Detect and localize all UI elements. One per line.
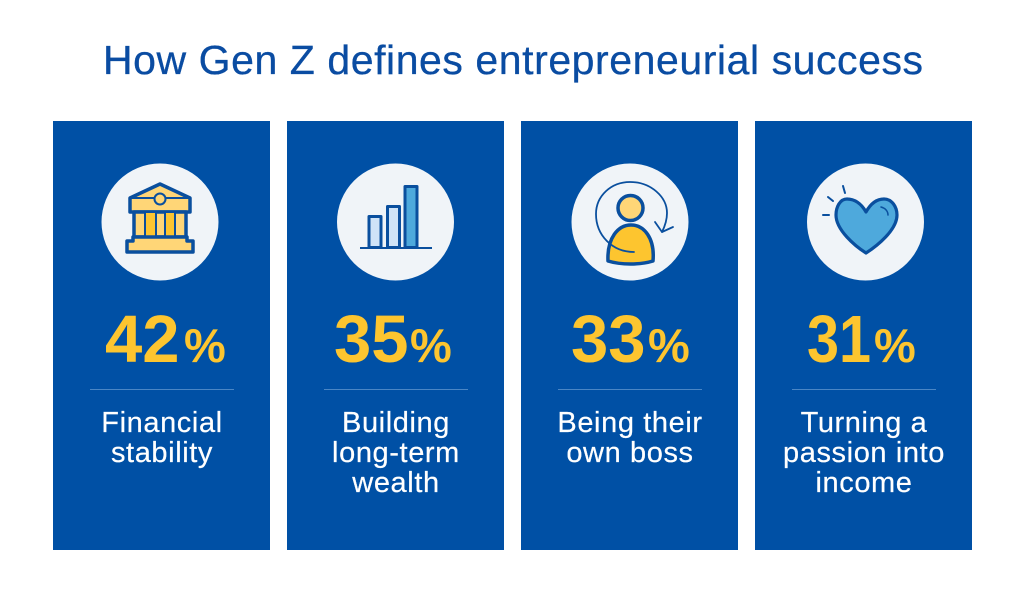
panel: passion into income [755,121,972,550]
label: income [815,467,913,499]
label: long-term [332,437,460,469]
icon: person with arrow [572,164,688,280]
stat: 33%: 33 [571,302,646,377]
label: Building [342,407,450,439]
stat: 35%: 35 [334,302,409,377]
stat: 42%: 42 [105,302,180,377]
stat: 31%: % [874,319,916,372]
label: stability [111,437,213,469]
label: own boss [566,437,694,469]
title: How Gen Z defines entrepreneurial success [103,37,923,83]
stat: 42% [105,302,226,377]
label: Financial [101,407,223,439]
stat: 42%: % [184,319,226,372]
panel: financial stability [53,121,270,550]
stat: 31%: 31 [807,302,871,377]
icon: heart [807,164,924,280]
label: wealth [351,467,440,499]
label: passion into [783,437,945,469]
panel: long-term wealth [287,121,504,550]
label: Being their [557,407,703,439]
stat: 35% [334,302,452,377]
stat: 31% [807,302,916,377]
stat: 33%: % [648,319,690,372]
stat: 35%: % [410,319,452,372]
panel: own boss [521,121,738,550]
stat: 33% [571,302,690,377]
icon: bank [102,164,218,280]
label: Turning a [801,407,928,439]
icon: bar chart [337,164,454,280]
